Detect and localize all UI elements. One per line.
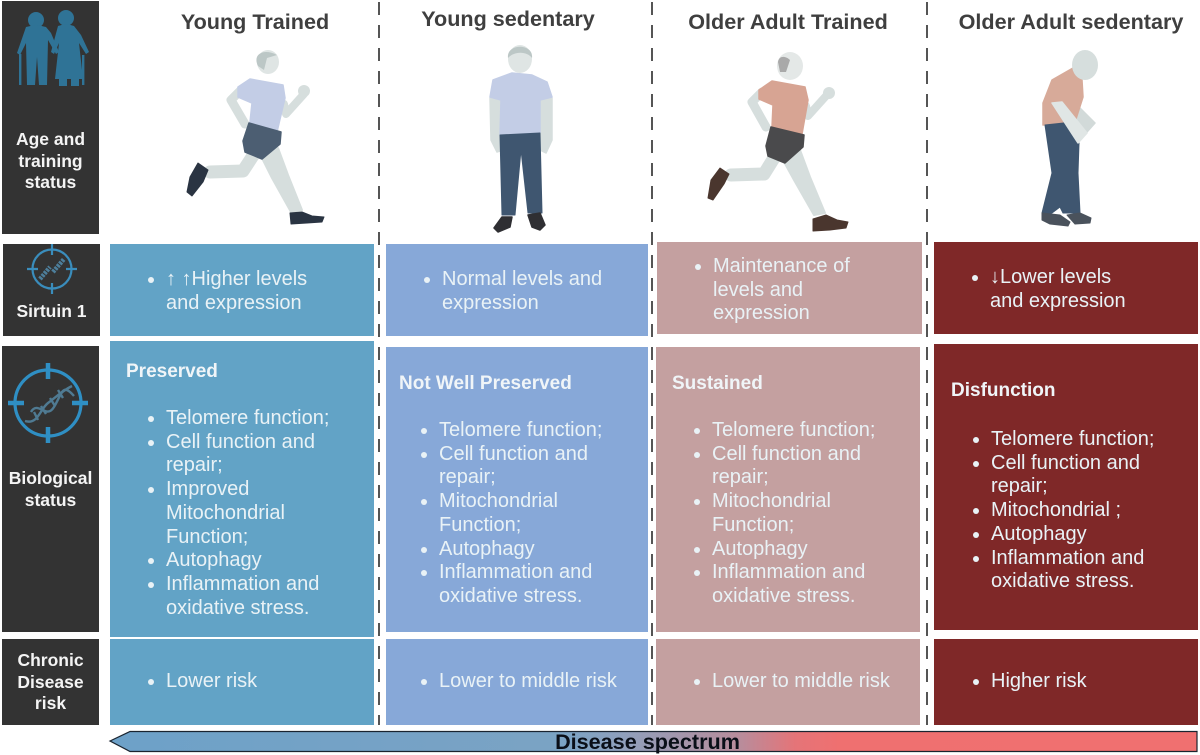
panel: young sedentary biological status: Autophagy [439,538,535,560]
panel: young trained biological status: oxidative stress. [166,597,309,619]
panel: young trained disease risk [110,639,374,725]
panel: older sedentary biological status: Cell function and [991,452,1140,474]
panel: older trained biological status: oxidative stress. [712,585,855,607]
panel: older sedentary biological status [934,344,1198,630]
heading: older adult sedentary: Older Adult sedentary [959,9,1183,34]
label text: Age and [16,129,85,149]
panel: young sedentary disease risk: Lower to middle risk [439,670,617,692]
panel: older trained disease risk: Lower to middle risk [712,670,890,692]
label text: status [25,490,76,510]
panel: young trained sirtuin: ↑ ↑Higher levels [166,268,307,290]
panel: young trained biological status: Mitochondrial [166,502,285,524]
panel: older trained biological status: Sustained [672,373,763,394]
icon: DNA target [8,363,88,443]
row label: chronic disease risk [2,639,99,725]
panel: older trained biological status: Autophagy [712,538,808,560]
figure: older runner [708,52,848,232]
label text [17,650,84,713]
panel: young sedentary sirtuin: expression [442,292,539,314]
row label: age and training status [2,1,99,234]
panel: young trained biological status: Preserved [126,361,218,382]
panel: young trained biological status: Function; [166,526,248,548]
panel: young sedentary sirtuin [386,244,648,336]
arrow: disease spectrum [108,729,1198,754]
panel: young sedentary biological status: oxidative stress. [439,585,582,607]
panel: older sedentary biological status: Telomere function; [991,428,1154,450]
panel: older trained sirtuin [657,242,922,334]
panel: older trained sirtuin: levels and [713,279,803,301]
panel: young trained biological status: Inflammation and [166,573,319,595]
panel: young sedentary biological status: Not Well Preserved [399,373,572,394]
arrow: disease spectrum: Disease spectrum [555,729,740,754]
panel: older sedentary sirtuin [934,242,1198,334]
label text: status [25,172,76,192]
panel: young sedentary biological status: Mitochondrial [439,490,558,512]
icon: elderly couple [17,10,89,86]
panel: young trained biological status: Cell function and [166,431,315,453]
panel: older trained biological status: repair; [712,466,769,488]
panel: older sedentary biological status: Disfunction [951,380,1056,401]
panel: young trained sirtuin: and expression [166,292,302,314]
panel: older trained biological status: Inflammation and [712,561,865,583]
panel: older sedentary biological status: oxidative stress. [991,570,1134,592]
panel: older sedentary sirtuin: ↓Lower levels [990,266,1111,288]
panel: older trained biological status: Telomere function; [712,419,875,441]
panel: older trained biological status: Function; [712,514,794,536]
row label: biological status [2,346,99,632]
panel: young sedentary biological status: repair; [439,466,496,488]
panel: older sedentary biological status: Autophagy [991,523,1087,545]
label text: risk [35,693,66,713]
heading: young trained: Young Trained [181,9,329,34]
label text: Biological [9,468,92,488]
panel: older trained sirtuin: Maintenance of [713,255,850,277]
row label: sirtuin 1 [3,244,100,336]
panel: older sedentary sirtuin: and expression [990,290,1126,312]
panel: young sedentary biological status: Telomere function; [439,419,602,441]
figure: older stooped man [1042,50,1098,226]
panel: young trained biological status: repair; [166,454,223,476]
heading: older adult trained: Older Adult Trained [688,9,888,34]
panel: young sedentary biological status: Inflammation and [439,561,592,583]
panel: older trained disease risk [656,639,920,725]
panel: young sedentary biological status [386,347,648,632]
panel: older sedentary disease risk [934,639,1198,725]
panel: older sedentary biological status: repair; [991,475,1048,497]
panel: young trained biological status: Autophagy [166,549,262,571]
label text: training [18,150,83,170]
panel: older trained biological status [656,347,920,632]
panel: older sedentary biological status: Mitochondrial ; [991,499,1121,521]
label text: Disease [17,672,84,692]
label text [9,468,92,510]
panel: older sedentary disease risk: Higher risk [991,670,1087,692]
figure: young standing man [489,45,553,233]
panel: young sedentary sirtuin: Normal levels and [442,268,602,290]
panel: older sedentary biological status: Inflammation and [991,547,1144,569]
heading: young sedentary: Young sedentary [421,6,595,31]
panel: young sedentary disease risk [386,639,648,725]
panel: young trained biological status [110,341,374,637]
panel: young trained biological status: Improved [166,478,249,500]
label text: Chronic [17,650,84,670]
panel: young sedentary biological status: Function; [439,514,521,536]
label text: Sirtuin 1 [16,301,86,321]
icon: sirtuin target [27,244,77,294]
panel: older trained sirtuin: expression [713,302,810,324]
label text [16,129,85,192]
panel: young trained disease risk: Lower risk [166,670,257,692]
panel: older trained biological status: Mitochondrial [712,490,831,512]
panel: young trained biological status: Telomere function; [166,407,329,429]
panel: young trained sirtuin [110,244,374,336]
panel: young sedentary biological status: Cell function and [439,443,588,465]
panel: older trained biological status: Cell function and [712,443,861,465]
figure: young runner [186,50,324,224]
